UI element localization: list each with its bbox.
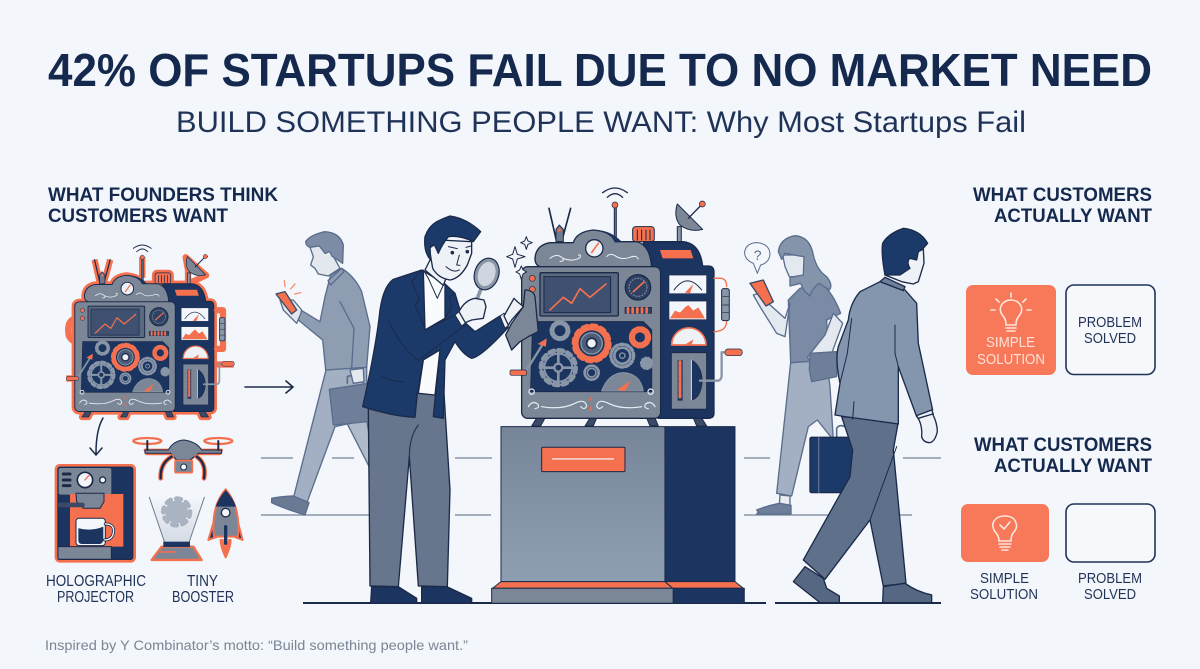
face [885, 248, 924, 284]
big machine [510, 188, 742, 426]
card: problem solved [1066, 285, 1155, 374]
arrow: founders to customers [245, 381, 293, 393]
card: simple solution with check bulb [961, 504, 1049, 562]
figure: man walking away with briefcase [793, 228, 937, 603]
pedestal label [542, 447, 625, 472]
label: simple solution: SOLUTION [970, 586, 1038, 603]
product label: holographic projector [46, 573, 146, 606]
card: empty outlined box [1066, 504, 1155, 562]
neck [425, 257, 447, 285]
heading: what customers actually want 1 [973, 185, 1152, 227]
card: simple solution with bulb [966, 285, 1056, 375]
arrow: machine down to products [90, 418, 103, 455]
shoes [793, 567, 839, 603]
products group [56, 438, 243, 561]
heading: what founders think: WHAT FOUNDERS THINK [48, 185, 278, 206]
card: simple solution with bulb: SIMPLE [986, 334, 1035, 351]
jacket [835, 282, 933, 424]
icon: coffee machine [56, 465, 135, 561]
icon: holographic projector [149, 497, 204, 560]
product label: holographic projector: PROJECTOR [57, 589, 134, 606]
speech bubble question: ? [754, 247, 762, 263]
title: 42% OF STARTUPS FAIL DUE TO NO MARKET NEED [48, 44, 1152, 96]
subtitle: BUILD SOMETHING PEOPLE WANT: Why Most Startups Fail [176, 106, 1026, 139]
figure: customer walking with phone [272, 232, 370, 515]
heading: what founders think: CUSTOMERS WANT [48, 206, 228, 227]
product label: tiny booster: BOOSTER [172, 589, 234, 606]
card: problem solved: SOLVED [1084, 330, 1136, 347]
speech bubble question [745, 243, 770, 273]
product label: holographic projector: HOLOGRAPHIC [46, 573, 146, 590]
sparkles [507, 237, 532, 279]
heading: what customers actually want 1: WHAT CUSTOMERS [973, 185, 1152, 206]
hair [425, 216, 481, 260]
icon: rocket [208, 489, 243, 557]
collar [880, 277, 905, 291]
label: simple solution: SIMPLE [980, 570, 1029, 587]
label: problem solved: SOLVED [1084, 586, 1136, 603]
jacket [363, 270, 508, 418]
label: simple solution [970, 570, 1038, 603]
legs [803, 417, 906, 586]
heading: what customers actually want 1: ACTUALLY WANT [994, 206, 1152, 227]
card: problem solved: PROBLEM [1078, 314, 1142, 331]
icon: drone [133, 438, 232, 478]
heading: what customers actually want 2 [974, 435, 1152, 477]
upper shirt [423, 271, 445, 330]
icon: light bulb [991, 293, 1031, 331]
figure: woman with phone [745, 236, 843, 514]
icon: check bulb [993, 516, 1017, 550]
wiping hand [504, 298, 523, 325]
label: problem solved [1078, 570, 1142, 603]
heading: what customers actually want 2: WHAT CUSTOMERS [974, 435, 1152, 456]
heading: what founders think [48, 185, 278, 227]
pedestal [492, 427, 744, 603]
pants [368, 393, 450, 587]
lower shirt [418, 350, 440, 395]
ground lines [261, 458, 941, 515]
heading: what customers actually want 2: ACTUALLY WANT [994, 456, 1152, 477]
small feature-laden machine [66, 245, 234, 417]
briefcase [810, 426, 853, 493]
magnifying glass [473, 258, 500, 298]
card: simple solution with bulb: SOLUTION [977, 351, 1045, 368]
label: problem solved: PROBLEM [1078, 570, 1142, 587]
collar [423, 270, 443, 298]
head [429, 240, 472, 280]
product label: tiny booster: TINY [187, 573, 218, 590]
cloth [506, 290, 538, 350]
hair [882, 228, 928, 275]
shoes [371, 587, 417, 603]
footer note: Inspired by Y Combinator’s motto: “Build something people want.” [45, 637, 468, 653]
figure: founder with magnifying glass [363, 216, 538, 603]
product label: tiny booster [172, 573, 234, 606]
hand [918, 414, 937, 443]
cuffs and hand [455, 312, 466, 326]
